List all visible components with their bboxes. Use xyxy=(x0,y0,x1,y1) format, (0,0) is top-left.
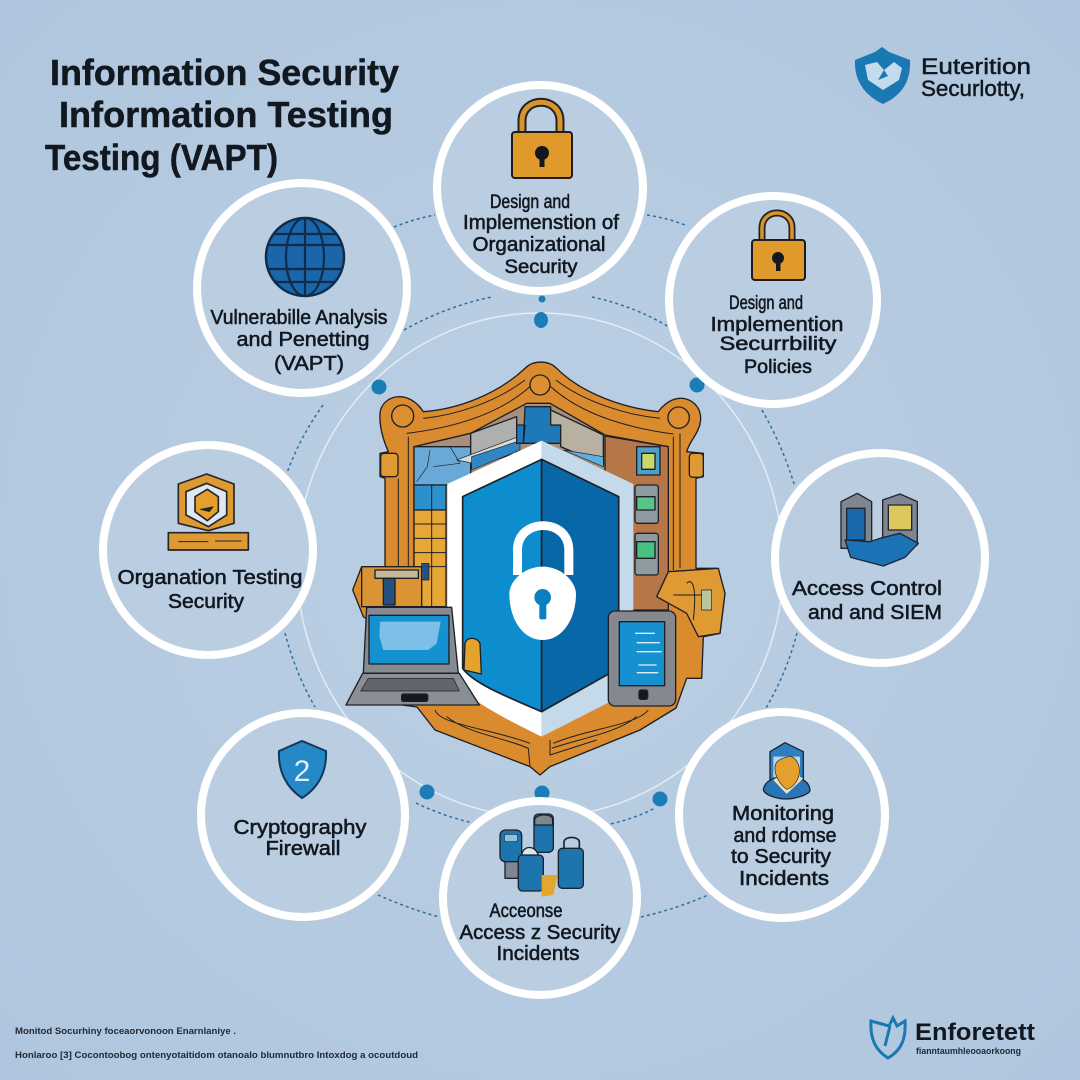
label: (VAPT) xyxy=(274,353,344,375)
node: organisation testing security xyxy=(103,445,313,655)
label: Vulnerabille Analysis xyxy=(210,307,388,329)
label: Security xyxy=(168,591,244,613)
label: Access z Security xyxy=(460,922,620,944)
label: and Penetting xyxy=(236,329,370,351)
label: Firewall xyxy=(266,838,340,860)
label: Organation Testing xyxy=(118,567,302,589)
footnote text: Monitod Socurhiny foceaorvonoon Enarnlaniye . xyxy=(15,1026,236,1036)
node: access control and SIEM xyxy=(775,453,985,663)
icon: monitor person xyxy=(763,743,810,799)
label: Incidents xyxy=(739,868,829,890)
outer white shield xyxy=(447,441,633,737)
node: access security incidents xyxy=(443,801,637,995)
label xyxy=(118,567,302,613)
title xyxy=(45,52,399,178)
inner blue shield xyxy=(463,459,619,712)
icon: emblem xyxy=(168,474,248,550)
logo: top right: Securlotty, xyxy=(921,76,1025,101)
icon: globe xyxy=(266,218,344,296)
laptop xyxy=(346,607,479,705)
small orange tag xyxy=(464,638,481,674)
title: Information Security xyxy=(50,52,399,93)
label xyxy=(234,817,366,860)
logo: bottom right xyxy=(871,1018,1035,1058)
label xyxy=(210,307,388,375)
logo: bottom right: Enforetett xyxy=(915,1019,1035,1046)
side device stacks xyxy=(362,563,725,637)
icon: padlock xyxy=(512,102,572,178)
label: Design and xyxy=(729,293,803,314)
ornate orange frame xyxy=(353,362,725,775)
label: Security xyxy=(504,257,578,278)
label: and and SIEM xyxy=(808,602,942,624)
label: Cryptography xyxy=(234,817,366,839)
label: Access Control xyxy=(792,578,942,600)
label: Implemenstion of xyxy=(463,212,619,234)
label xyxy=(710,293,844,378)
node: cryptography firewall xyxy=(201,713,405,917)
padlock xyxy=(509,521,576,640)
label: Incidents xyxy=(496,943,580,965)
tablet xyxy=(608,611,676,706)
label: Policies xyxy=(744,357,812,378)
icon: group of locks xyxy=(500,814,583,897)
label xyxy=(792,578,942,624)
footnote text: Honlaroo [3] Cocontoobog ontenyotaitidom otanoalo blumnutbro Intoxdog a ocoutdoud xyxy=(15,1050,418,1060)
logo: top right: Euterition xyxy=(921,54,1031,79)
label: to Security xyxy=(731,846,831,868)
logo: bottom right: fianntaumhleooaorkoong xyxy=(916,1046,1021,1056)
label: Organizational xyxy=(472,234,606,256)
icon: padlock xyxy=(752,213,805,280)
inner building panels xyxy=(414,403,668,610)
label: Acceonse xyxy=(490,901,562,922)
label: and rdomse xyxy=(734,825,836,847)
node: monitoring and response to security incidents xyxy=(679,712,885,918)
central shield illustration xyxy=(346,362,725,775)
label: Design and xyxy=(490,192,570,213)
title: Testing (VAPT) xyxy=(45,137,278,178)
label: Monitoring xyxy=(732,803,834,825)
node: design and implementation of organisational security xyxy=(437,85,643,291)
title: Information Testing xyxy=(59,94,393,135)
label xyxy=(731,803,836,890)
orbit rings and connector dots xyxy=(285,215,797,917)
node: vulnerability analysis and penetration testing xyxy=(197,183,407,393)
label: Securrbility xyxy=(720,334,837,355)
icon: access gates xyxy=(841,493,918,566)
footnote text xyxy=(15,1026,418,1060)
label xyxy=(463,192,619,278)
icon: shield number: 2 xyxy=(294,755,310,788)
node: design and implementation security policies xyxy=(669,196,877,404)
label: Implemention xyxy=(710,314,844,336)
icon: shield number xyxy=(279,741,326,798)
logo: top right xyxy=(855,47,1031,104)
label xyxy=(460,901,620,965)
